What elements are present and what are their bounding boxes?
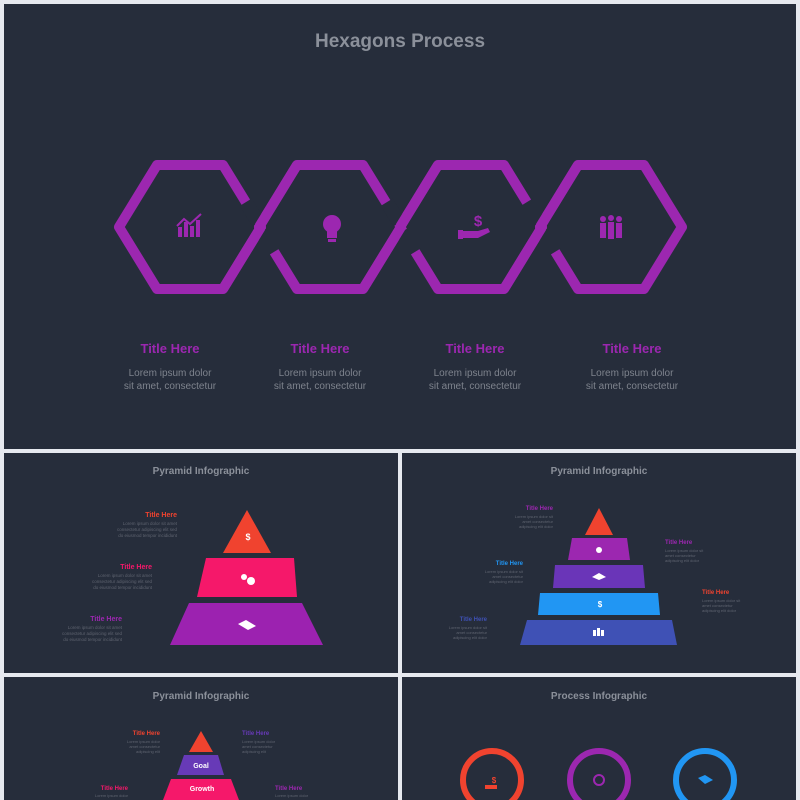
panel: pyramid 5 levels: amet consectetur xyxy=(665,553,696,558)
text blocks: Title Here xyxy=(140,341,200,356)
panel: pyramid goal growth: amet consectetur xyxy=(129,744,161,749)
panel: pyramid goal growth: Lorem ipsum dolor xyxy=(242,739,276,744)
icons: $ xyxy=(492,776,497,785)
panel: pyramid 5 levels: Lorem ipsum dolor sit xyxy=(665,548,704,553)
text blocks: Title Here xyxy=(602,341,662,356)
panel: pyramid 3 levels: Pyramid Infographic xyxy=(153,466,250,477)
panel: pyramid 5 levels: Title Here xyxy=(526,506,554,512)
hexagon chain xyxy=(119,165,682,289)
panel: pyramid goal growth: Title Here xyxy=(242,731,270,737)
panel: pyramid goal growth xyxy=(4,677,398,800)
panel: pyramid goal growth: Goal xyxy=(193,763,209,770)
labels xyxy=(90,512,177,623)
panel: process infographic: Process Infographic xyxy=(551,691,648,702)
panel: pyramid 5 levels: adipiscing elit dolor xyxy=(665,558,700,563)
panel: hexagons process: sit amet, consectetur xyxy=(429,381,522,392)
panel: pyramid 3 levels: do eiusmod tempor incididunt xyxy=(63,637,123,642)
panel: pyramid 5 levels: amet consectetur xyxy=(492,574,524,579)
panel: hexagons process: sit amet, consectetur xyxy=(586,381,679,392)
icon: bulb xyxy=(323,215,341,242)
panel: pyramid 3 levels xyxy=(4,453,398,673)
panel: pyramid 5 levels: amet consectetur xyxy=(456,630,488,635)
panel: pyramid 5 levels xyxy=(402,453,796,673)
panel: pyramid 5 levels: Title Here xyxy=(702,590,730,596)
panel: pyramid 5 levels: amet consectetur xyxy=(522,519,554,524)
panel: hexagons process: sit amet, consectetur xyxy=(124,381,217,392)
panel: pyramid 5 levels: adipiscing elit dolor xyxy=(702,608,737,613)
panel: pyramid 3 levels: do eiusmod tempor incididunt xyxy=(93,585,153,590)
panel: pyramid 5 levels: Title Here xyxy=(460,617,488,623)
crossing gaps xyxy=(246,202,555,252)
icon: chart xyxy=(177,214,201,237)
panel: pyramid 5 levels: Title Here xyxy=(665,540,693,546)
panel: pyramid 5 levels: Title Here xyxy=(496,561,524,567)
panel: pyramid goal growth: Growth xyxy=(190,786,214,793)
text blocks: Title Here xyxy=(290,341,350,356)
panel: pyramid goal growth: amet consectetur xyxy=(242,744,273,749)
panel: pyramid 3 levels: consectetur adipiscing elit sed xyxy=(92,579,152,584)
title: Hexagons Process xyxy=(315,31,485,52)
panel: pyramid goal growth: adipiscing elit xyxy=(242,749,267,754)
panel: pyramid 3 levels: do eiusmod tempor incididunt xyxy=(118,533,178,538)
panel: pyramid goal growth: Lorem ipsum dolor xyxy=(275,793,309,798)
panel: pyramid 3 levels: consectetur adipiscing elit sed xyxy=(117,527,177,532)
pyramid layers xyxy=(223,510,271,553)
panel: pyramid 5 levels: Lorem ipsum dolor sit xyxy=(449,625,488,630)
panel: pyramid goal growth: adipiscing elit xyxy=(136,749,161,754)
panel: pyramid 3 levels: $ xyxy=(245,532,251,542)
panel: pyramid 5 levels: Lorem ipsum dolor sit xyxy=(515,514,554,519)
panel: pyramid 5 levels: Lorem ipsum dolor sit xyxy=(702,598,741,603)
labels: Title Here xyxy=(90,616,122,623)
panel: pyramid goal growth: Title Here xyxy=(101,786,129,792)
panel: process infographic xyxy=(402,677,796,800)
panel: hexagons process: Lorem ipsum dolor xyxy=(591,368,674,379)
panel: pyramid 5 levels: adipiscing elit dolor xyxy=(453,635,488,640)
panel: pyramid 5 levels: Lorem ipsum dolor sit xyxy=(485,569,524,574)
panel: pyramid 3 levels: Lorem ipsum dolor sit amet xyxy=(98,573,153,578)
panel: pyramid goal growth: Title Here xyxy=(275,786,303,792)
panel: pyramid 5 levels: Pyramid Infographic xyxy=(551,466,648,477)
panel: pyramid 3 levels: Lorem ipsum dolor sit amet xyxy=(123,521,178,526)
panel: pyramid 5 levels: adipiscing elit dolor xyxy=(489,579,524,584)
panel: pyramid 3 levels: consectetur adipiscing elit sed xyxy=(62,631,122,636)
panel: pyramid 5 levels: $ xyxy=(598,600,603,609)
icon: people xyxy=(600,215,622,239)
labels: Title Here xyxy=(120,564,152,571)
text blocks xyxy=(140,341,662,356)
labels: Title Here xyxy=(145,512,177,519)
panel: pyramid goal growth: Pyramid Infographic xyxy=(153,691,250,702)
panel: pyramid goal growth: Lorem ipsum dolor xyxy=(95,793,129,798)
icon: hand dollar: $ xyxy=(474,213,483,230)
panel: pyramid goal growth: Lorem ipsum dolor xyxy=(127,739,161,744)
icon: hand dollar xyxy=(458,213,490,239)
panel: pyramid 5 levels: adipiscing elit dolor xyxy=(519,524,554,529)
panel: pyramid 5 levels: amet consectetur xyxy=(702,603,733,608)
text blocks: Title Here xyxy=(445,341,505,356)
panel: hexagons process: sit amet, consectetur xyxy=(274,381,367,392)
panel: hexagons process: Lorem ipsum dolor xyxy=(279,368,362,379)
panel: pyramid goal growth: Title Here xyxy=(133,731,161,737)
panel: hexagons process: Lorem ipsum dolor xyxy=(129,368,212,379)
panel: hexagons process xyxy=(4,4,796,449)
panel: pyramid 3 levels: Lorem ipsum dolor sit amet xyxy=(68,625,123,630)
circles xyxy=(463,751,521,800)
panel: hexagons process: Lorem ipsum dolor xyxy=(434,368,517,379)
